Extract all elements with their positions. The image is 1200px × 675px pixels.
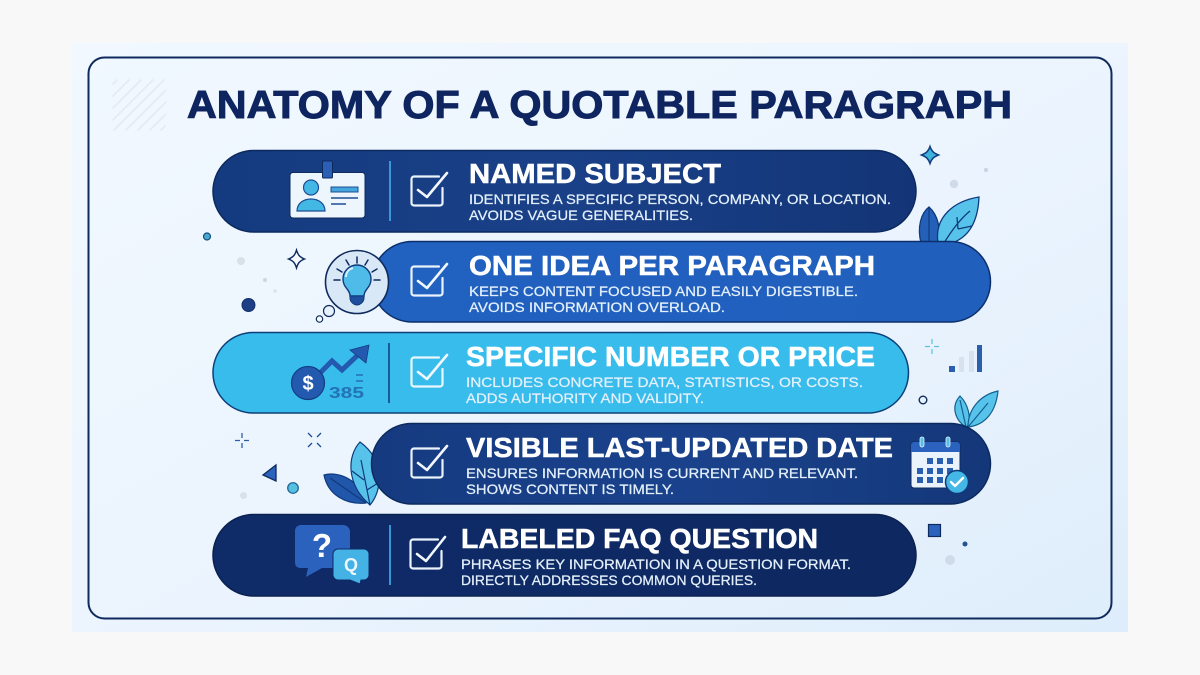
row 1: named subject	[213, 150, 916, 232]
leaves right of row 4	[955, 391, 998, 427]
heading 4: VISIBLE LAST-UPDATED DATE	[466, 432, 893, 463]
divider 1	[389, 161, 391, 221]
icon: calendar	[911, 437, 968, 494]
heading 1: NAMED SUBJECT	[469, 158, 721, 189]
icon: dollar chart: 385	[329, 385, 364, 402]
icon: question bubbles: ?	[312, 527, 332, 564]
pill 2	[372, 242, 990, 322]
heading 5: LABELED FAQ QUESTION	[461, 523, 818, 554]
icon: checkbox 5	[410, 537, 445, 568]
icon: dollar chart	[292, 345, 369, 402]
description 1: AVOIDS VAGUE GENERALITIES.	[469, 207, 693, 223]
icon: dollar chart: $	[302, 373, 314, 395]
decorative shapes: right side	[919, 146, 988, 565]
description 4	[466, 465, 858, 497]
description 4: ENSURES INFORMATION IS CURRENT AND RELEVANT.	[466, 465, 858, 481]
decorative hatch pattern	[113, 80, 166, 130]
pill 5	[213, 514, 916, 596]
description 2: AVOIDS INFORMATION OVERLOAD.	[469, 299, 725, 315]
icon: checkbox 4	[412, 446, 447, 478]
row 5: labeled faq question	[213, 514, 916, 596]
description 1	[469, 191, 891, 223]
description 4: SHOWS CONTENT IS TIMELY.	[466, 481, 674, 497]
heading 2: ONE IDEA PER PARAGRAPH	[469, 250, 875, 281]
pill 3	[213, 332, 908, 413]
row 3: specific number or price	[213, 332, 908, 413]
leaves left of row 4	[324, 442, 379, 505]
description 3: INCLUDES CONCRETE DATA, STATISTICS, OR COSTS.	[466, 374, 863, 390]
main card frame	[88, 58, 1112, 618]
heading 3: SPECIFIC NUMBER OR PRICE	[466, 341, 875, 372]
row 4: visible last-updated date	[372, 424, 990, 504]
icon: question bubbles	[295, 525, 369, 584]
divider 3	[388, 343, 390, 403]
description 2: KEEPS CONTENT FOCUSED AND EASILY DIGESTIBLE.	[469, 283, 858, 299]
leaves top right	[919, 197, 979, 243]
icon: checkbox 2	[412, 264, 447, 296]
icon: question bubbles: Q	[344, 555, 358, 575]
description 5: PHRASES KEY INFORMATION IN A QUESTION FORMAT.	[461, 556, 851, 572]
pill 4	[372, 424, 990, 504]
background panel	[72, 43, 1128, 632]
divider 5	[389, 525, 391, 585]
description 5	[461, 556, 851, 588]
row 2: one idea per paragraph	[326, 242, 990, 322]
description 3: ADDS AUTHORITY AND VALIDITY.	[466, 390, 704, 406]
description 1: IDENTIFIES A SPECIFIC PERSON, COMPANY, OR LOCATION.	[469, 191, 891, 207]
icon: light bulb	[326, 250, 388, 314]
decorative shapes: left side	[204, 233, 334, 499]
icon: id badge	[290, 161, 365, 218]
icon: checkbox 1	[412, 173, 447, 206]
description 2	[469, 283, 858, 315]
icon: checkbox 3	[412, 355, 447, 386]
title: ANATOMY OF A QUOTABLE PARAGRAPH	[187, 84, 1012, 127]
description 5: DIRECTLY ADDRESSES COMMON QUERIES.	[461, 572, 757, 588]
pill 1	[213, 150, 916, 232]
description 3	[466, 374, 863, 406]
